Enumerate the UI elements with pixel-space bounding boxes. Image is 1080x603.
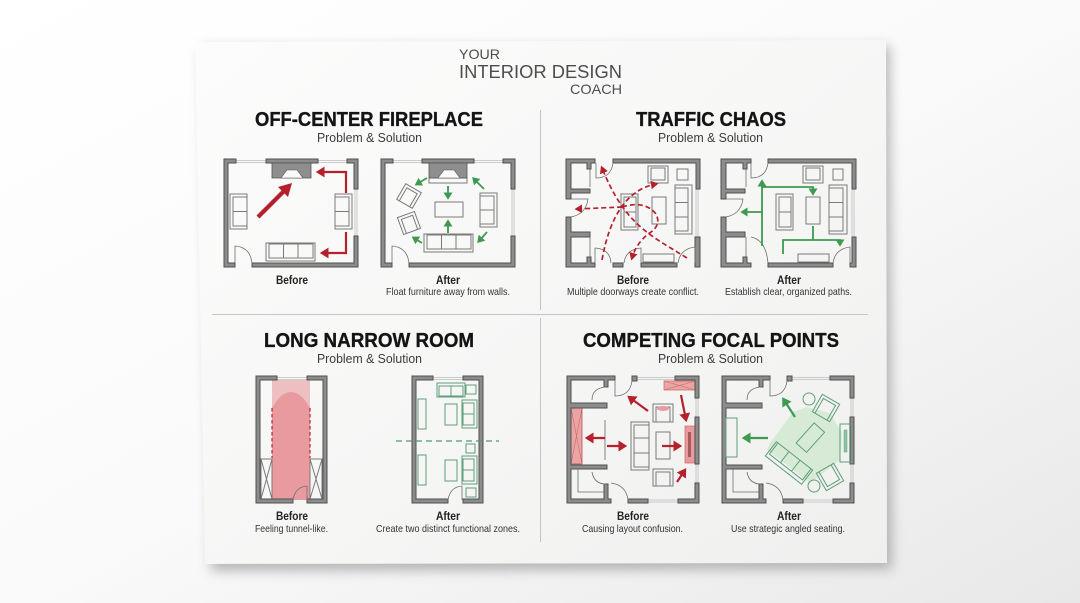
dashed red arrows: crossing traffic paths bbox=[577, 168, 687, 260]
heading: long narrow room: LONG NARROW ROOM bbox=[264, 329, 474, 352]
floor plan: traffic before bbox=[566, 159, 700, 267]
floor plan: fireplace after bbox=[381, 159, 515, 267]
caption: Feeling tunnel-like. bbox=[255, 523, 328, 535]
panel: competing focal points bbox=[567, 329, 854, 535]
label: before: Before bbox=[276, 273, 308, 287]
panel: off-center fireplace bbox=[224, 108, 515, 298]
green arrows: unified focal direction bbox=[745, 400, 795, 438]
red arrows: competing attention bbox=[587, 395, 686, 482]
caption: Create two distinct functional zones. bbox=[376, 523, 520, 535]
floor plan: focal after bbox=[722, 376, 854, 503]
subheading: Problem & Solution bbox=[658, 131, 763, 145]
floor plan: narrow before bbox=[256, 376, 327, 503]
subheading: Problem & Solution bbox=[658, 352, 763, 366]
floor plan: narrow after bbox=[396, 376, 499, 503]
caption: Causing layout confusion. bbox=[582, 523, 683, 535]
tunnel band bbox=[272, 380, 310, 500]
label: before: Before bbox=[617, 273, 649, 287]
caption: Multiple doorways create conflict. bbox=[567, 286, 699, 298]
logo: Your Interior Design Coach: COACH bbox=[570, 81, 622, 97]
red console bbox=[664, 381, 695, 390]
arrow: window side to fireplace bbox=[318, 172, 346, 193]
label: after: After bbox=[777, 509, 801, 523]
green arrows: organized paths bbox=[743, 182, 840, 254]
heading: off-center fireplace: OFF-CENTER FIREPLACE bbox=[255, 108, 483, 131]
logo: Your Interior Design Coach: YOUR bbox=[459, 46, 500, 62]
zone one furniture bbox=[418, 383, 477, 429]
label: before: Before bbox=[617, 509, 649, 523]
label: before: Before bbox=[276, 509, 308, 523]
label: after: After bbox=[777, 273, 801, 287]
subheading: Problem & Solution bbox=[317, 131, 422, 145]
paper sheet bbox=[195, 40, 887, 564]
caption: Float furniture away from walls. bbox=[386, 286, 510, 298]
arrow: window side to sofa bbox=[322, 232, 346, 253]
tunnel arch bbox=[272, 392, 310, 500]
green arrows: flow around seating bbox=[414, 178, 487, 243]
floor plan: traffic after bbox=[721, 159, 856, 267]
arrowhead: diagonal bbox=[278, 183, 292, 197]
label: after: After bbox=[436, 509, 460, 523]
subheading: Problem & Solution bbox=[317, 352, 422, 366]
logo: Your Interior Design Coach: INTERIOR DESIGN bbox=[459, 62, 622, 82]
heading: competing focal points: COMPETING FOCAL POINTS bbox=[583, 329, 839, 352]
heading: traffic chaos: TRAFFIC CHAOS bbox=[636, 108, 786, 131]
red tv bbox=[685, 426, 696, 463]
zone two furniture bbox=[418, 444, 477, 497]
red closet bbox=[571, 408, 582, 464]
panel: long narrow room bbox=[255, 329, 520, 535]
green seating zone bbox=[767, 407, 842, 483]
panel: traffic chaos bbox=[566, 108, 856, 298]
label: after: After bbox=[436, 273, 460, 287]
floor plan: fireplace before bbox=[224, 159, 358, 267]
logo: Your Interior Design Coach bbox=[459, 46, 622, 97]
caption: Use strategic angled seating. bbox=[731, 523, 845, 535]
caption: Establish clear, organized paths. bbox=[725, 286, 852, 298]
arrow: diagonal focal pull bbox=[258, 190, 285, 217]
floor plan: focal before bbox=[567, 376, 699, 503]
zone divider bbox=[396, 440, 499, 442]
